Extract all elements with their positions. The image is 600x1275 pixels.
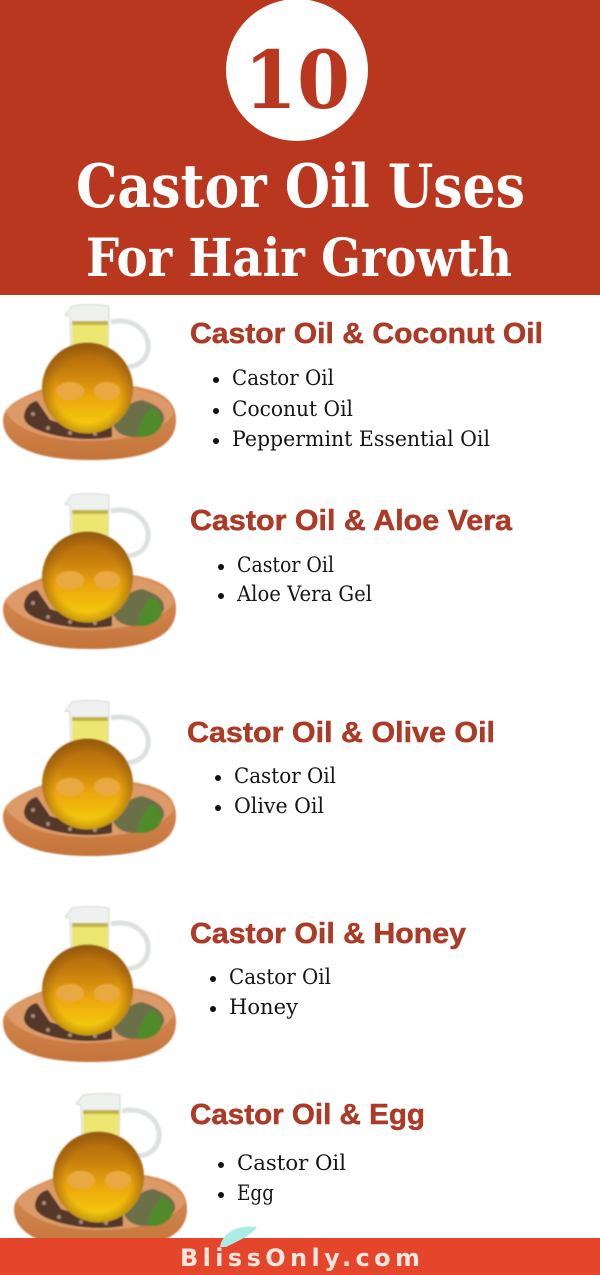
icon: oil jar on plate [3, 700, 176, 856]
heading: Castor Oil & Coconut Oil [190, 318, 543, 350]
icon: oil jar on plate [3, 906, 176, 1062]
ingredient list: Honey [229, 995, 298, 1019]
section: egg [14, 1094, 425, 1249]
ingredient list: Castor Oil [234, 764, 336, 788]
icon: feather [220, 1226, 257, 1247]
ingredient list [213, 366, 490, 451]
ingredient list: Egg [237, 1181, 274, 1205]
ingredient list: Aloe Vera Gel [236, 582, 372, 606]
icon: oil jar on plate [14, 1094, 187, 1249]
heading: Castor Oil & Egg [190, 1099, 425, 1131]
ingredient list: Coconut Oil [232, 397, 353, 421]
footer brand: BlissOnly.com [180, 1244, 420, 1272]
ingredient list: Castor Oil [237, 553, 334, 577]
number badge: 10 [244, 33, 350, 127]
heading: Castor Oil & Olive Oil [187, 717, 495, 749]
header banner [0, 0, 600, 295]
ingredient list: Castor Oil [229, 965, 331, 989]
section: coconut oil [3, 304, 543, 460]
ingredient list: Olive Oil [234, 794, 324, 818]
ingredient list [218, 1151, 346, 1205]
icon: oil jar on plate [3, 304, 176, 460]
ingredient list: Castor Oil [232, 366, 334, 390]
ingredient list [210, 965, 331, 1019]
icon: oil jar on plate [3, 494, 176, 649]
ingredient list [218, 553, 372, 606]
footer bar [0, 1226, 600, 1275]
ingredient list: Castor Oil [237, 1151, 346, 1175]
heading: Castor Oil & Honey [190, 918, 466, 950]
number badge [226, 0, 368, 141]
section: honey [3, 906, 466, 1062]
section: olive oil [3, 700, 495, 856]
title line 1: Castor Oil Uses [76, 152, 525, 222]
heading: Castor Oil & Aloe Vera [190, 505, 513, 537]
ingredient list [215, 764, 336, 818]
ingredient list: Peppermint Essential Oil [232, 427, 490, 451]
section: aloe vera [3, 494, 513, 649]
title line 2: For Hair Growth [86, 228, 512, 289]
